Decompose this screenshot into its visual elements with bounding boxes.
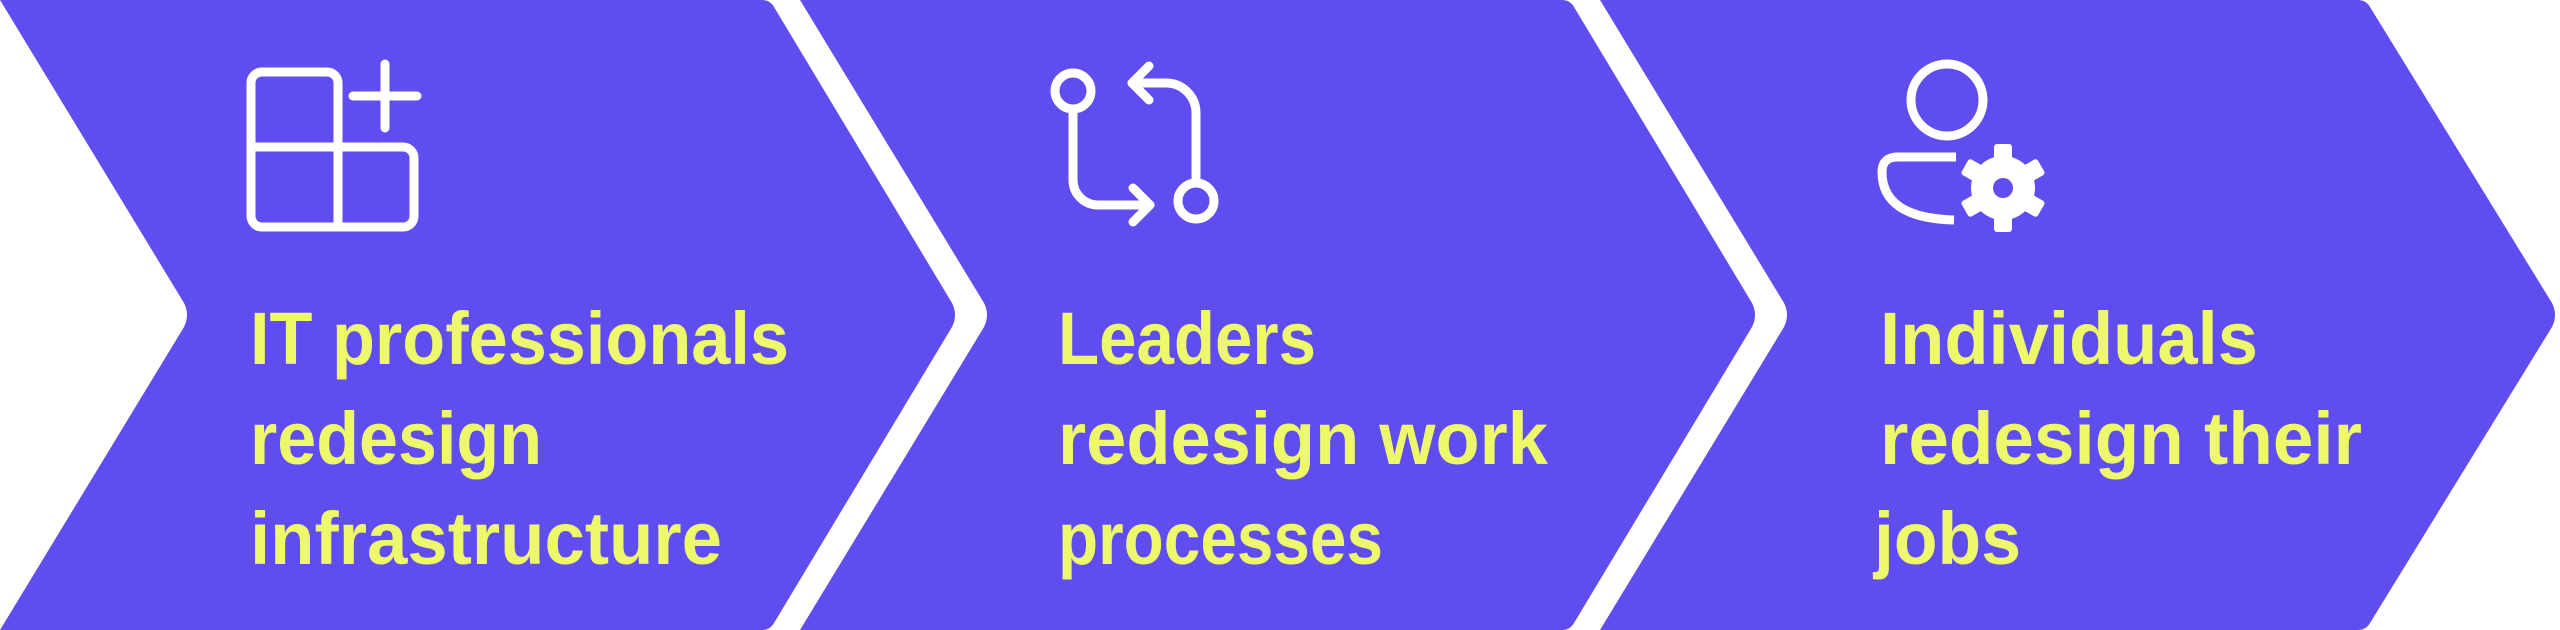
icon: person with gear (1882, 64, 2046, 232)
text: IT professionals redesign infrastructure: redesign (250, 397, 542, 480)
text: Individuals redesign their jobs: Individuals (1880, 297, 2258, 380)
text: IT professionals redesign infrastructure: infrastructure (250, 497, 722, 580)
text: IT professionals redesign infrastructure: IT professionals (250, 297, 789, 380)
text: Leaders redesign work processes: processes (1058, 497, 1383, 580)
text: Leaders redesign work processes: redesign work (1058, 397, 1549, 480)
text: Individuals redesign their jobs: jobs (1872, 497, 2021, 580)
panel: Leaders (800, 0, 1755, 630)
icon: grid plus (251, 64, 417, 227)
text: Individuals redesign their jobs (1872, 297, 2362, 580)
panel: Individuals (1600, 0, 2555, 630)
text: Individuals redesign their jobs: redesign their (1880, 397, 2362, 480)
panel: IT professionals (0, 0, 955, 630)
text: Leaders redesign work processes: Leaders (1058, 297, 1316, 380)
icon: pull request arrows (1055, 66, 1214, 222)
text: IT professionals redesign infrastructure (250, 297, 789, 580)
text: Leaders redesign work processes (1058, 297, 1549, 580)
